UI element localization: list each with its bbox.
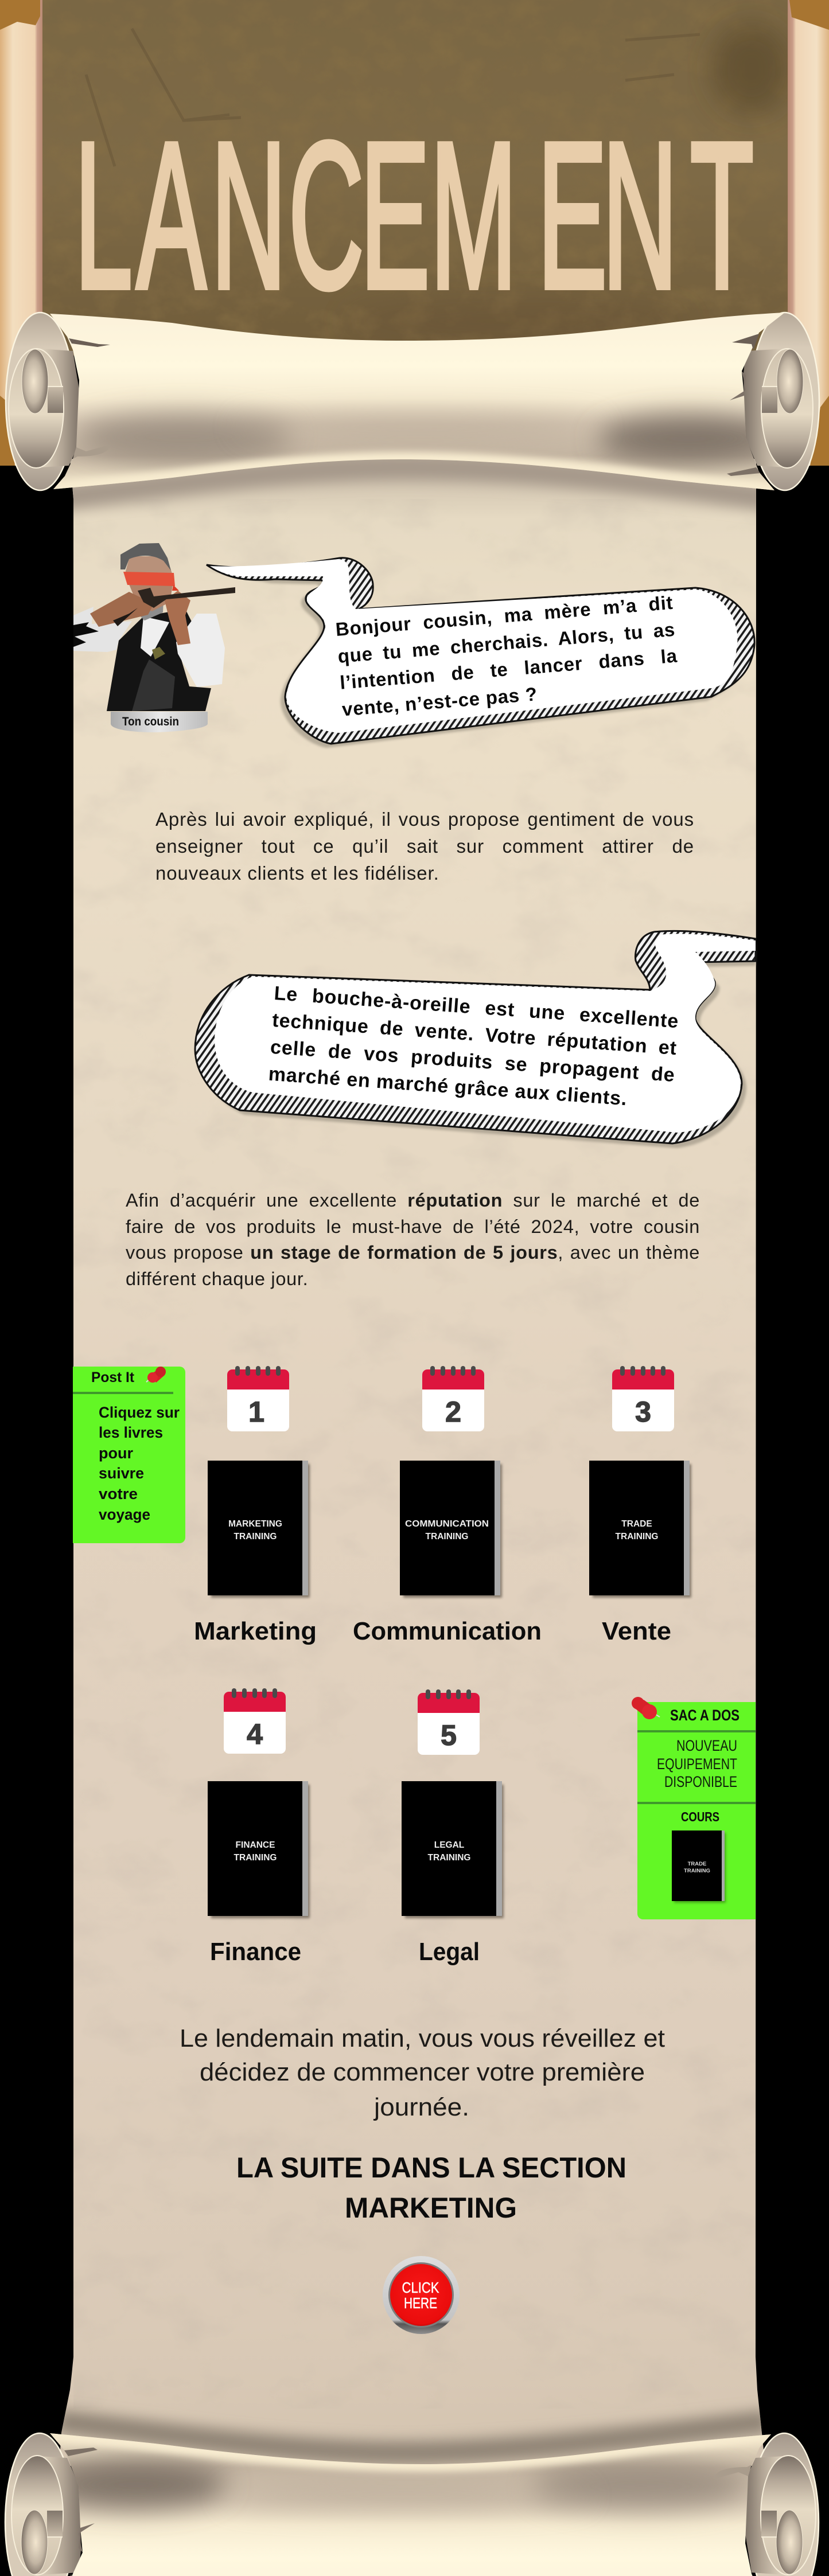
call to action heading xyxy=(236,2152,626,2224)
character: ton cousin with rifle xyxy=(73,543,235,711)
label: vente: Vente xyxy=(602,1617,671,1645)
post-it note: votre xyxy=(99,1485,138,1502)
left parchment roller xyxy=(0,0,42,466)
calendar day 2: 2 xyxy=(445,1396,461,1428)
book: legal training: TRAINING xyxy=(428,1853,470,1863)
paragraph: afin d'acquérir: différent chaque jour. xyxy=(126,1269,308,1289)
paragraph: afin d'acquérir: vous propose un stage de formation de 5 jours, avec un thème xyxy=(126,1242,700,1263)
post-it note: pour xyxy=(99,1445,133,1462)
title: LANCEMENT xyxy=(75,99,754,331)
calendar day 5: 5 xyxy=(441,1719,457,1751)
post-it note xyxy=(73,1367,185,1543)
label: legal: Legal xyxy=(419,1938,480,1966)
bubble 1 text: Bonjour cousin, ma mère m’a dit xyxy=(335,592,674,640)
calendar day 3: 3 xyxy=(635,1396,651,1428)
bubble 2 text: Le bouche-à-oreille est une excellente xyxy=(274,982,679,1032)
label: marketing: Marketing xyxy=(194,1617,317,1645)
parchment paper body xyxy=(57,459,769,2466)
button: click here: CLICK xyxy=(402,2279,439,2296)
paragraph: après lui avoir expliqué: nouveaux clients et les fidéliser. xyxy=(155,862,439,884)
button: click here: HERE xyxy=(404,2294,437,2312)
backpack panel: sac a dos xyxy=(637,1702,756,1919)
paragraph: afin d'acquérir xyxy=(126,1190,700,1289)
paragraph: afin d'acquérir: Afin d’acquérir une excellente réputation sur le marché et de xyxy=(126,1190,700,1211)
backpack panel: sac a dos: EQUIPEMENT xyxy=(657,1755,737,1773)
post-it note: les livres xyxy=(99,1424,163,1441)
book: communication training: TRAINING xyxy=(426,1532,468,1541)
post-it note: suivre xyxy=(99,1465,144,1482)
backpack panel: sac a dos: SAC A DOS xyxy=(670,1707,740,1724)
post-it note: Cliquez sur xyxy=(99,1404,180,1421)
pedestal: ton cousin xyxy=(111,712,208,732)
label: communication: Communication xyxy=(353,1617,542,1645)
right parchment roller xyxy=(788,0,829,466)
calendar day 4 xyxy=(224,1688,286,1754)
calendar day 4: 4 xyxy=(247,1718,263,1750)
book: trade training: TRADE xyxy=(621,1519,652,1529)
bubble 2 text: marché en marché grâce aux clients. xyxy=(268,1063,628,1110)
book: communication training xyxy=(400,1461,502,1598)
backpack panel: sac a dos: TRADE xyxy=(688,1861,706,1867)
book: marketing training xyxy=(208,1461,310,1598)
backpack panel: sac a dos: NOUVEAU xyxy=(676,1737,737,1754)
closing text: le lendemain matin: Le lendemain matin, vous vous réveillez et xyxy=(180,2024,665,2052)
book: marketing training: TRAINING xyxy=(234,1532,277,1541)
speech bubble 1 xyxy=(202,558,754,748)
book: finance training xyxy=(208,1781,310,1918)
paragraph: afin d'acquérir: faire de vos produits le must-have de l’été 2024, votre cousin xyxy=(126,1216,700,1237)
post-it note: voyage xyxy=(99,1506,150,1523)
label: finance: Finance xyxy=(210,1938,301,1966)
book: trade training: TRAINING xyxy=(616,1532,658,1541)
bubble 2 text: celle de vos produits se propagent de xyxy=(270,1036,676,1086)
book: finance training: TRAINING xyxy=(234,1853,277,1863)
call to action heading: MARKETING xyxy=(345,2192,517,2224)
book: finance training: FINANCE xyxy=(236,1840,275,1850)
speech bubble 2 xyxy=(195,931,756,1148)
calendar day 5 xyxy=(418,1689,480,1755)
backpack panel: sac a dos: COURS xyxy=(681,1809,719,1824)
closing text: le lendemain matin: journée. xyxy=(373,2093,469,2121)
book: trade training xyxy=(589,1461,691,1598)
paragraph: après lui avoir expliqué xyxy=(155,809,694,884)
book: marketing training: MARKETING xyxy=(228,1519,282,1529)
closing text: le lendemain matin xyxy=(180,2024,665,2121)
bubble 1 text: l’intention de te lancer dans la xyxy=(339,645,678,693)
icon: post-it pushpin xyxy=(146,1367,166,1383)
paragraph: après lui avoir expliqué: enseigner tout ce qu’il sait sur comment attirer de xyxy=(155,836,694,857)
bubble 1 text: que tu me cherchais. Alors, tu as xyxy=(337,618,676,667)
book: legal training xyxy=(402,1781,504,1918)
bubble 1 text xyxy=(335,592,678,720)
bottom scroll roll xyxy=(5,2433,819,2576)
top scroll roll xyxy=(6,313,819,490)
calendar day 1 xyxy=(227,1366,289,1431)
calendar day 3 xyxy=(612,1366,674,1431)
post-it note: Post It xyxy=(91,1369,135,1385)
paragraph: après lui avoir expliqué: Après lui avoir expliqué, il vous propose gentiment de vous xyxy=(155,809,694,830)
closing text: le lendemain matin: décidez de commencer votre première xyxy=(200,2058,645,2086)
backpack panel: sac a dos: TRAINING xyxy=(684,1868,710,1874)
button: click here xyxy=(383,2256,460,2334)
backpack panel: sac a dos: DISPONIBLE xyxy=(664,1773,737,1790)
calendar day 2 xyxy=(422,1366,484,1431)
book: communication training: COMMUNICATION xyxy=(405,1519,489,1529)
bubble 2 text xyxy=(268,982,679,1110)
pedestal: ton cousin: Ton cousin xyxy=(122,715,179,728)
icon: backpack pushpin xyxy=(632,1697,660,1719)
header: aged brown parchment background xyxy=(40,0,792,356)
call to action heading: LA SUITE DANS LA SECTION xyxy=(236,2152,626,2184)
calendar day 1: 1 xyxy=(248,1396,264,1428)
bubble 1 text: vente, n’est-ce pas ? xyxy=(341,683,538,720)
book: legal training: LEGAL xyxy=(434,1840,464,1850)
bubble 2 text: technique de vente. Votre réputation et xyxy=(271,1009,678,1059)
